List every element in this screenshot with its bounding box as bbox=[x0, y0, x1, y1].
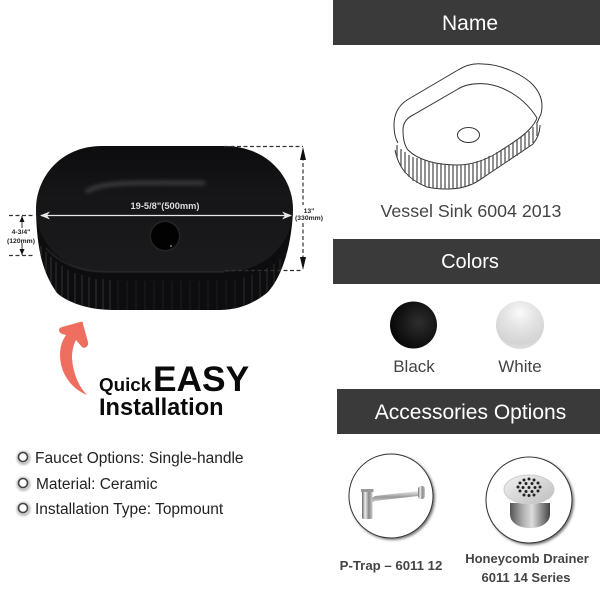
header: colors: Colors bbox=[441, 251, 499, 273]
sink flutes bbox=[41, 246, 286, 310]
header: accessories options: Accessories Options bbox=[375, 401, 566, 424]
swatch: white: White bbox=[498, 357, 542, 376]
accessory: honeycomb drainer bbox=[465, 457, 589, 585]
dimension: height 4-3/4 inch bbox=[7, 216, 35, 256]
product photo: black vessel sink bbox=[36, 146, 293, 310]
heading: quick easy installation bbox=[99, 360, 249, 421]
rim edge highlight bbox=[46, 248, 224, 272]
bullet: faucet options: Faucet Options: Single-handle bbox=[35, 450, 244, 467]
header: colors bbox=[333, 239, 600, 284]
swatch: white bbox=[496, 301, 544, 376]
accessory: honeycomb drainer: 6011 14 Series bbox=[482, 570, 570, 585]
drainer fixture bbox=[504, 475, 554, 528]
accessory: p-trap bbox=[340, 454, 442, 573]
heading: quick easy installation: Quick bbox=[99, 374, 152, 395]
dimension: width 19-5/8 inch: 19-5/8"(500mm) bbox=[130, 201, 200, 211]
header: accessories options bbox=[337, 389, 600, 434]
heading: quick easy installation: Installation bbox=[99, 395, 224, 421]
dimension: depth 13 inch: (330mm) bbox=[295, 215, 323, 222]
dimension: height 4-3/4 inch: 4-3/4" bbox=[12, 229, 30, 236]
dimension: height 4-3/4 inch: (120mm) bbox=[7, 238, 35, 245]
bullet: installation type: Installation Type: Topmount bbox=[35, 501, 224, 518]
accessory: honeycomb drainer: Honeycomb Drainer bbox=[465, 551, 589, 566]
fluted side bbox=[395, 125, 540, 189]
bullet: material: Material: Ceramic bbox=[36, 476, 158, 493]
drain ring bbox=[458, 128, 480, 142]
accessory: p-trap: P-Trap – 6011 12 bbox=[340, 558, 442, 573]
dimension: depth 13 inch bbox=[224, 146, 323, 270]
bowl highlight bbox=[86, 183, 205, 192]
line drawing: sink outline bbox=[394, 64, 542, 189]
outer rim bbox=[394, 64, 542, 125]
feature list bbox=[18, 450, 244, 518]
icon: coral curved arrow bbox=[59, 322, 88, 395]
header: name: Name bbox=[442, 12, 498, 35]
sink rim and bowl bbox=[36, 146, 293, 272]
caption: product name: Vessel Sink 6004 2013 bbox=[381, 201, 562, 221]
swatch: black bbox=[390, 302, 437, 376]
p-trap fixture bbox=[361, 486, 425, 519]
header: name bbox=[333, 0, 600, 45]
dimension: depth 13 inch: 13" bbox=[304, 208, 314, 215]
drain hole bbox=[150, 220, 180, 252]
inner basin bbox=[403, 84, 537, 165]
heading: quick easy installation: EASY bbox=[153, 360, 249, 399]
swatch: black: Black bbox=[393, 357, 435, 376]
sink outer fluted body bbox=[36, 212, 293, 310]
